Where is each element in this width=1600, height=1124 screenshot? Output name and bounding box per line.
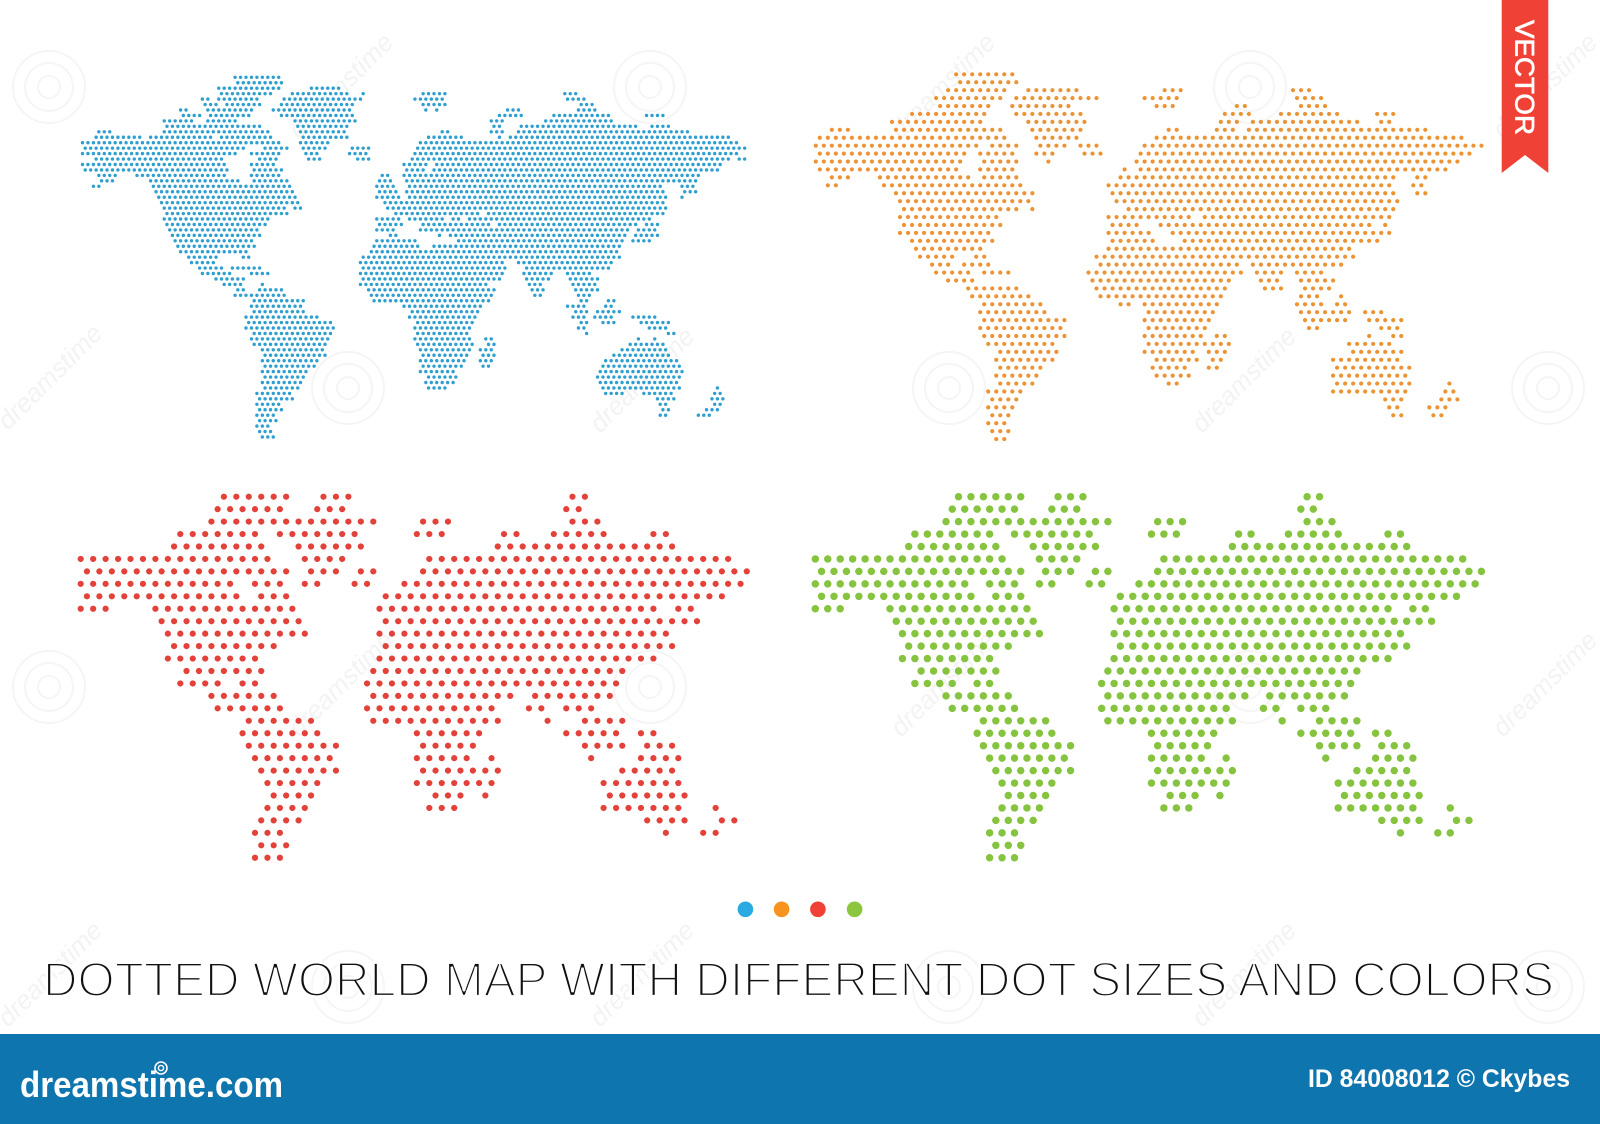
watermark text: dreamstime xyxy=(1185,321,1302,438)
watermark text: dreamstime xyxy=(282,27,399,144)
watermark text: dreamstime xyxy=(1185,915,1302,1032)
watermark text: dreamstime xyxy=(583,915,700,1032)
watermark text: dreamstime xyxy=(1486,27,1600,144)
map: blue small dots xyxy=(82,77,745,437)
ribbon: vector badge: VECTOR xyxy=(1510,20,1540,135)
footer bar xyxy=(0,1034,1600,1124)
footer credit: image id: ID 84008012 © Ckybes xyxy=(1308,1065,1570,1093)
ribbon: vector badge xyxy=(1502,0,1548,173)
watermark text: dreamstime xyxy=(884,27,1001,144)
footer logo: dreamstime.com: dreamstime.com xyxy=(20,1064,283,1105)
map: orange medium dots xyxy=(816,74,1482,439)
map: red large dots xyxy=(81,497,747,858)
watermark text: dreamstime xyxy=(884,625,1001,742)
map: green extra-large dots xyxy=(815,497,1482,858)
watermark text: dreamstime xyxy=(1486,625,1600,742)
watermark text: dreamstime xyxy=(583,321,700,438)
watermark text: dreamstime xyxy=(282,625,399,742)
title: DOTTED WORLD MAP WITH DIFFERENT DOT SIZES AND COLORS xyxy=(43,954,1554,1007)
colour legend dots xyxy=(738,902,862,917)
